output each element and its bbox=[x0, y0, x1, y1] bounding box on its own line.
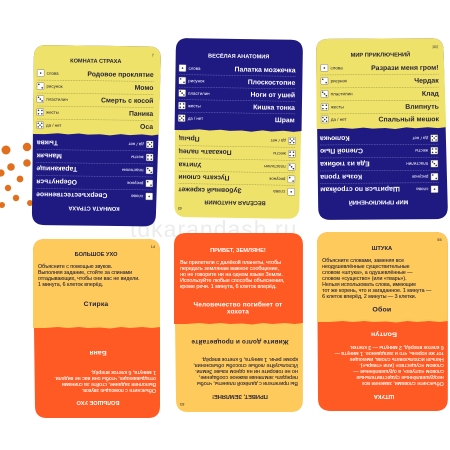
rules text: неодушевлённые существительные bbox=[356, 374, 444, 380]
row: да / нет: да / нет bbox=[128, 142, 144, 147]
heading: МИР ПРИКЛЮЧЕНИЙ bbox=[351, 50, 410, 59]
card number: 83 bbox=[180, 402, 184, 406]
row: да / нет bbox=[178, 115, 295, 124]
side: top bbox=[36, 52, 154, 131]
rules text bbox=[54, 369, 156, 393]
side: top bbox=[320, 45, 440, 124]
rules text: Выполняя задание, стойте за спинами bbox=[38, 269, 132, 276]
row: слова bbox=[320, 183, 439, 193]
row: да / нет bbox=[36, 122, 153, 131]
rules text: отгадывающих, чтобы они вас не видели. bbox=[54, 375, 156, 381]
row: жесты: Кишка тонка bbox=[253, 104, 295, 112]
row: слова: Зубовный скрежет bbox=[177, 186, 242, 195]
rules text: словом «штука», а одушевлённые — bbox=[322, 270, 413, 276]
row: жесты bbox=[37, 109, 153, 120]
rules text: Объясните с помощью звуков. bbox=[38, 264, 112, 270]
row: жесты: Показать палец bbox=[178, 148, 232, 155]
row: да / нет: Оса bbox=[140, 124, 153, 131]
side: bottom, upside down bbox=[35, 139, 153, 211]
row: рисунок: рисунок bbox=[188, 78, 205, 83]
rules text: 6 клеток вперёд, 2 минуты — 3 клетки. bbox=[350, 344, 444, 350]
row: да / нет: да / нет bbox=[412, 136, 428, 141]
side: top bbox=[178, 52, 296, 124]
row: рисунок: рисунок bbox=[46, 84, 63, 89]
row: жесты: жесты bbox=[273, 151, 286, 156]
rules text: но не говорите ни на одном языке Земли. bbox=[180, 272, 283, 278]
row: да / нет: Спальный мешок bbox=[379, 115, 440, 124]
row: пластилин: Ноги от ушей bbox=[250, 91, 295, 99]
row: да / нет: Прыщ bbox=[179, 135, 200, 142]
row: пластилин: пластилин bbox=[121, 168, 144, 173]
row: жесты: жесты bbox=[331, 104, 344, 109]
row: да / нет: да / нет bbox=[46, 123, 61, 128]
decorative orange dots bbox=[0, 143, 33, 208]
side: top bbox=[322, 238, 442, 313]
row: слова: Палатка мозжечка bbox=[235, 66, 296, 74]
row: слова: слова bbox=[416, 187, 428, 192]
side: top bbox=[180, 248, 284, 315]
row: пластилин bbox=[37, 96, 153, 107]
row: жесты: Паника bbox=[129, 111, 153, 118]
row: слова: Сверхъестественное bbox=[36, 191, 107, 198]
rules text bbox=[322, 258, 432, 300]
row: рисунок: Обернуться bbox=[36, 178, 77, 186]
row: жесты: Маньяк bbox=[36, 152, 62, 159]
card: Штука bbox=[317, 232, 448, 411]
row: да / нет: да / нет bbox=[331, 117, 347, 122]
rules text: словом «существо» (или «тварь»). bbox=[359, 362, 444, 368]
heading: ВЕСЁЛАЯ АНАТОМИЯ bbox=[208, 53, 269, 60]
heading: КОМНАТА СТРАХА bbox=[68, 204, 120, 211]
rules text: тот же корень, что и загаданное. 1 минута — bbox=[334, 350, 444, 356]
heading: ПРИВЕТ, ЗЕМЛЯНЕ! bbox=[212, 393, 268, 399]
row: рисунок: Пускать слюни bbox=[178, 173, 230, 181]
rules text: тот же корень, что и загаданное. 1 минута — bbox=[322, 288, 432, 294]
row: слова bbox=[179, 65, 296, 76]
watermark: tdkarandash.ru bbox=[130, 216, 297, 242]
rules text: Объясните словами, заменяя все bbox=[322, 258, 404, 264]
row: рисунок: рисунок bbox=[331, 78, 347, 83]
row: жесты bbox=[320, 144, 438, 155]
row: рисунок bbox=[36, 176, 153, 187]
row: рисунок bbox=[179, 77, 296, 89]
card: Весёлая анатомия bbox=[173, 38, 303, 219]
row: пластилин: пластилин bbox=[331, 91, 353, 96]
row: слова: слова bbox=[131, 194, 143, 199]
card number: 7 bbox=[152, 53, 154, 57]
row: пластилин: Клад bbox=[422, 91, 439, 98]
row: жесты bbox=[36, 150, 153, 161]
row: рисунок: Козья тропа bbox=[320, 173, 362, 180]
row: пластилин bbox=[178, 159, 295, 170]
row: да / нет: да / нет bbox=[271, 138, 286, 143]
row: рисунок: Плоскостопие bbox=[248, 79, 296, 87]
rules text: Объясните с помощью звуков. bbox=[82, 387, 156, 393]
row: пластилин: Улитка bbox=[178, 161, 201, 168]
heading: БОЛЬШОЕ УХО bbox=[76, 399, 119, 405]
side: bottom, upside down bbox=[180, 338, 298, 406]
rules text: словом «существо» (или «тварь»). bbox=[322, 276, 407, 282]
side: bottom, upside down bbox=[320, 134, 439, 207]
row: жесты bbox=[178, 102, 295, 114]
answer word: Стирка bbox=[84, 301, 108, 308]
card number: 55 bbox=[437, 238, 442, 242]
card: Большое ухо bbox=[33, 239, 160, 418]
row: рисунок: Момо bbox=[135, 85, 154, 92]
row: слова: слова bbox=[47, 71, 59, 76]
row: рисунок bbox=[320, 170, 439, 181]
answer word: Болтун bbox=[371, 331, 397, 337]
row: да / нет bbox=[321, 115, 440, 124]
row: да / нет bbox=[179, 135, 296, 144]
rules text bbox=[193, 356, 298, 387]
answer word: Обои bbox=[372, 306, 391, 313]
row: пластилин: Смерть с косой bbox=[101, 96, 153, 105]
rules text: кроме речи. 1 минута, 6 клеток вперёд. bbox=[201, 356, 298, 362]
rules text: 1 минута, 6 клеток вперёд. bbox=[91, 369, 156, 375]
rules text bbox=[180, 259, 284, 290]
heading: ВЕСЁЛАЯ АНАТОМИЯ bbox=[204, 198, 266, 206]
row: рисунок: рисунок bbox=[412, 174, 428, 179]
side: bottom, upside down bbox=[334, 331, 444, 399]
row: рисунок bbox=[320, 77, 439, 88]
row: пластилин bbox=[36, 163, 153, 174]
rules text: но не говорите ни на одном языке Земли. bbox=[195, 368, 298, 374]
row: рисунок: рисунок bbox=[269, 176, 285, 182]
row: жесты: Влипнуть bbox=[405, 104, 439, 111]
row: пластилин bbox=[320, 90, 439, 101]
row: жесты: жесты bbox=[415, 148, 428, 153]
rules text: Вы прилетели с далёкой планеты, чтобы bbox=[197, 380, 298, 387]
rules text: Выполняя задание, стойте за спинами bbox=[62, 381, 156, 388]
row: пластилин: Тараканище bbox=[36, 165, 77, 172]
row: жесты bbox=[178, 146, 295, 157]
answer phrase: хохота bbox=[227, 309, 249, 315]
rules text: отгадывающих, чтобы они вас не видели. bbox=[38, 276, 140, 282]
row: да / нет bbox=[37, 139, 153, 148]
row: слова: слова bbox=[188, 66, 201, 71]
card: Комната страха bbox=[32, 45, 161, 227]
rules text: 6 клеток вперёд, 2 минуты — 3 клетки. bbox=[322, 294, 416, 300]
rules text bbox=[334, 344, 444, 386]
row: да / нет: Шрам bbox=[275, 117, 295, 124]
rules text: Нельзя использовать слова, имеющие bbox=[350, 356, 444, 362]
row: слова bbox=[36, 189, 153, 200]
rules text: 1 минута, 6 клеток вперёд. bbox=[38, 282, 103, 288]
answer phrase: Живите долго и процветайте bbox=[191, 338, 290, 346]
row: пластилин: пластилин bbox=[264, 164, 286, 169]
rules text bbox=[38, 264, 140, 288]
row: слова bbox=[320, 64, 439, 75]
rules text: Нельзя использовать слова, имеющие bbox=[322, 282, 416, 288]
answer word: Баня bbox=[89, 349, 107, 356]
row: слова: Родовое проклятие bbox=[87, 71, 154, 79]
row: пластилин: Еда из тюбика bbox=[320, 160, 370, 168]
rules text: Вы прилетели с далёкой планеты, чтобы bbox=[180, 259, 281, 266]
row: жесты bbox=[321, 103, 439, 114]
rules text: неодушевлённые существительные bbox=[322, 264, 410, 270]
heading: ПРИВЕТ, ЗЕМЛЯНЕ! bbox=[210, 248, 266, 254]
row: да / нет: Тыква bbox=[37, 139, 58, 146]
row: рисунок: рисунок bbox=[127, 181, 143, 186]
side: top bbox=[38, 245, 155, 308]
row: слова: слова bbox=[330, 65, 343, 70]
row: жесты: жесты bbox=[46, 110, 59, 115]
row: жесты: Слепой Пью bbox=[320, 147, 363, 155]
row: слова: слова bbox=[273, 189, 285, 194]
row: пластилин: пластилин bbox=[46, 97, 68, 102]
rules text: Используйте любые способы объяснения, bbox=[193, 362, 298, 369]
row: да / нет: да / нет bbox=[188, 116, 203, 121]
heading: ШТУКА bbox=[372, 246, 392, 252]
row: пластилин bbox=[179, 90, 295, 101]
card number: 43 bbox=[178, 206, 182, 210]
rules text: передать землянам важное сообщение, bbox=[180, 266, 279, 272]
row: жесты: жесты bbox=[131, 155, 144, 160]
row: рисунок bbox=[178, 171, 295, 183]
answer phrase bbox=[194, 301, 282, 315]
side: bottom, upside down bbox=[54, 349, 156, 405]
row: слова: Разрази меня гром! bbox=[371, 65, 439, 72]
heading: КОМНАТА СТРАХА bbox=[70, 58, 121, 65]
rules text: Объясните словами, заменяя все bbox=[362, 380, 444, 386]
row: пластилин: пластилин bbox=[188, 91, 210, 96]
row: слова bbox=[177, 184, 295, 195]
row: слова bbox=[37, 70, 154, 81]
card: Привет, земляне! bbox=[174, 233, 303, 412]
row: да / нет bbox=[320, 134, 438, 142]
rules text: передать землянам важное сообщение, bbox=[199, 374, 298, 380]
heading: ШТУКА bbox=[374, 393, 394, 399]
row: рисунок bbox=[37, 83, 154, 94]
heading: МИР ПРИКЛЮЧЕНИЙ bbox=[349, 198, 408, 207]
rules text: кроме речи. 1 минута, 6 клеток вперёд. bbox=[180, 284, 277, 290]
row: слова: Шариться по стройкам bbox=[320, 185, 400, 193]
rules text: Используйте любые способы объяснения, bbox=[180, 277, 284, 284]
card number: 14 bbox=[151, 245, 155, 249]
row: жесты: жесты bbox=[188, 103, 201, 108]
row: пластилин bbox=[320, 157, 438, 168]
heading: БОЛЬШОЕ УХО bbox=[75, 252, 118, 258]
row: да / нет: Колючка bbox=[320, 134, 350, 141]
row: рисунок: Чердак bbox=[414, 78, 439, 85]
rules text: словом «штука», а одушевлённые — bbox=[353, 368, 444, 374]
side: bottom, upside down bbox=[177, 135, 296, 212]
card: Мир приключений bbox=[316, 38, 448, 220]
row: пластилин: пластилин bbox=[406, 161, 428, 166]
card number: 102 bbox=[432, 45, 438, 49]
answer phrase: Человечество погибнет от bbox=[194, 301, 282, 308]
